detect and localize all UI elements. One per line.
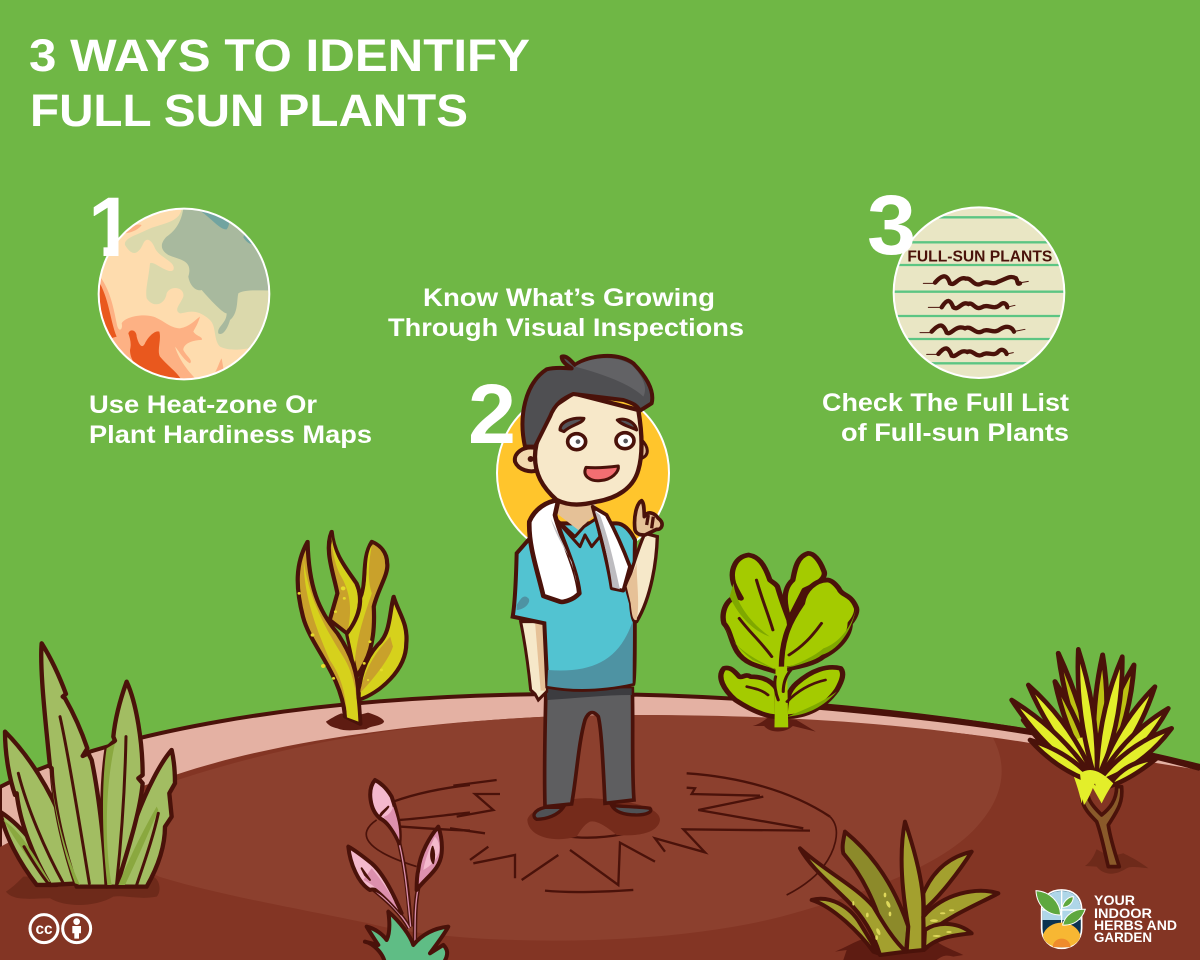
logo: your indoor herbs and garden: HERBS AND bbox=[1094, 918, 1177, 933]
left ear bbox=[515, 448, 538, 471]
soil mound bbox=[326, 713, 384, 730]
lower leaf tongues bbox=[1080, 770, 1113, 805]
shoes bbox=[534, 805, 651, 819]
flower 3 bbox=[417, 827, 442, 890]
tall right leaf bbox=[102, 682, 143, 887]
title bbox=[29, 30, 530, 136]
back leaves bbox=[1023, 653, 1134, 783]
lower right leaf bbox=[785, 667, 843, 717]
number 2: 2 bbox=[468, 367, 516, 461]
eyebrows bbox=[560, 418, 584, 432]
trunk bbox=[1082, 787, 1122, 867]
soil cracks left of figure bbox=[366, 785, 470, 867]
label: step 1: Use Heat-zone Or bbox=[89, 391, 317, 419]
creative commons icons: cc bbox=[35, 921, 53, 938]
stems bbox=[370, 833, 419, 942]
hand bbox=[635, 501, 662, 535]
soil bbox=[1085, 849, 1148, 874]
flower 2 bbox=[348, 847, 402, 913]
leaf veins bbox=[18, 717, 158, 885]
circle 3: plant list bbox=[890, 207, 1067, 378]
long left leaf bbox=[800, 848, 906, 955]
logo emblem bbox=[1036, 890, 1085, 948]
ground bbox=[0, 694, 1200, 960]
lower left leaf bbox=[721, 668, 778, 717]
lowest left leaf bbox=[0, 812, 57, 885]
raised arm bbox=[626, 533, 657, 622]
label: step 2: Through Visual Inspections bbox=[388, 314, 744, 342]
mouth bbox=[585, 466, 618, 481]
logo: your indoor herbs and garden: INDOOR bbox=[1094, 906, 1152, 921]
left leaf bbox=[5, 732, 80, 885]
collar bbox=[553, 516, 600, 547]
right big leaf bbox=[781, 580, 857, 670]
yellow circle behind figure bbox=[497, 387, 669, 559]
number 3: 3 bbox=[867, 178, 916, 272]
front leaves bbox=[1012, 649, 1172, 787]
label: step 3: Check The Full List bbox=[822, 389, 1070, 417]
figure: man upper body bbox=[513, 356, 662, 690]
soil cracks bbox=[450, 773, 836, 895]
plant: yellow ochre leaves bbox=[298, 532, 407, 730]
face bbox=[535, 393, 641, 505]
far right leaf bbox=[117, 750, 175, 887]
right leaves bbox=[923, 852, 972, 910]
shadow bbox=[527, 798, 660, 839]
title: FULL SUN PLANTS bbox=[30, 85, 468, 136]
low left leaf bbox=[812, 899, 878, 953]
left arm bbox=[521, 622, 547, 700]
plant: large green agave bbox=[0, 643, 175, 905]
label: step 1: Plant Hardiness Maps bbox=[89, 421, 372, 449]
trousers bbox=[545, 688, 634, 807]
label: step 3: of Full-sun Plants bbox=[841, 419, 1069, 447]
right ear bbox=[642, 440, 647, 458]
plant: yellow spiky shrub bbox=[1012, 649, 1172, 874]
leaf speckles bbox=[298, 586, 383, 681]
flower 1 bbox=[370, 780, 400, 843]
logo: your indoor herbs and garden: GARDEN bbox=[1094, 930, 1152, 945]
plant: pink flowers bbox=[348, 780, 448, 960]
neck bbox=[557, 500, 597, 530]
stem bbox=[774, 667, 788, 727]
far right leaf bbox=[358, 597, 407, 700]
leaf shading bbox=[3, 743, 158, 885]
label: step 1 bbox=[89, 391, 372, 449]
circle 1: heat-zone map bbox=[93, 208, 280, 383]
plant: olive spiky bbox=[800, 822, 998, 960]
green base leaves bbox=[365, 912, 448, 960]
figure: man lower body bbox=[521, 622, 660, 839]
front leaf bbox=[298, 542, 360, 724]
soil shadow bbox=[6, 877, 160, 905]
soil bbox=[753, 717, 816, 732]
eyes bbox=[568, 434, 586, 450]
soil bbox=[835, 940, 963, 960]
hair bbox=[523, 356, 652, 447]
shirt bbox=[513, 523, 635, 690]
back left leaf bbox=[843, 832, 908, 952]
label: step 2: Know What’s Growing bbox=[423, 284, 715, 312]
label: step 3 bbox=[822, 389, 1070, 447]
list heading: FULL-SUN PLANTS bbox=[907, 248, 1053, 265]
veins bbox=[739, 580, 825, 702]
leaf centre bbox=[1063, 734, 1140, 803]
list scribbles bbox=[920, 276, 1028, 356]
center leaf bbox=[902, 822, 923, 952]
back right leaf bbox=[347, 542, 387, 677]
plant: lettuce leaves bbox=[721, 553, 857, 732]
logo wordmark: YOUR bbox=[1094, 893, 1135, 908]
left big leaf bbox=[723, 555, 791, 673]
tall leaf bbox=[41, 643, 107, 887]
title: 3 WAYS TO IDENTIFY bbox=[29, 30, 530, 81]
back middle leaf bbox=[329, 532, 360, 633]
creative commons icons bbox=[30, 915, 91, 943]
logo: your indoor herbs and garden bbox=[1036, 890, 1177, 948]
number 1: 1 bbox=[88, 180, 135, 274]
label: step 2 bbox=[388, 284, 744, 342]
back leaf bbox=[785, 553, 824, 620]
towel bbox=[529, 500, 579, 602]
yellow speckles bbox=[852, 893, 954, 940]
